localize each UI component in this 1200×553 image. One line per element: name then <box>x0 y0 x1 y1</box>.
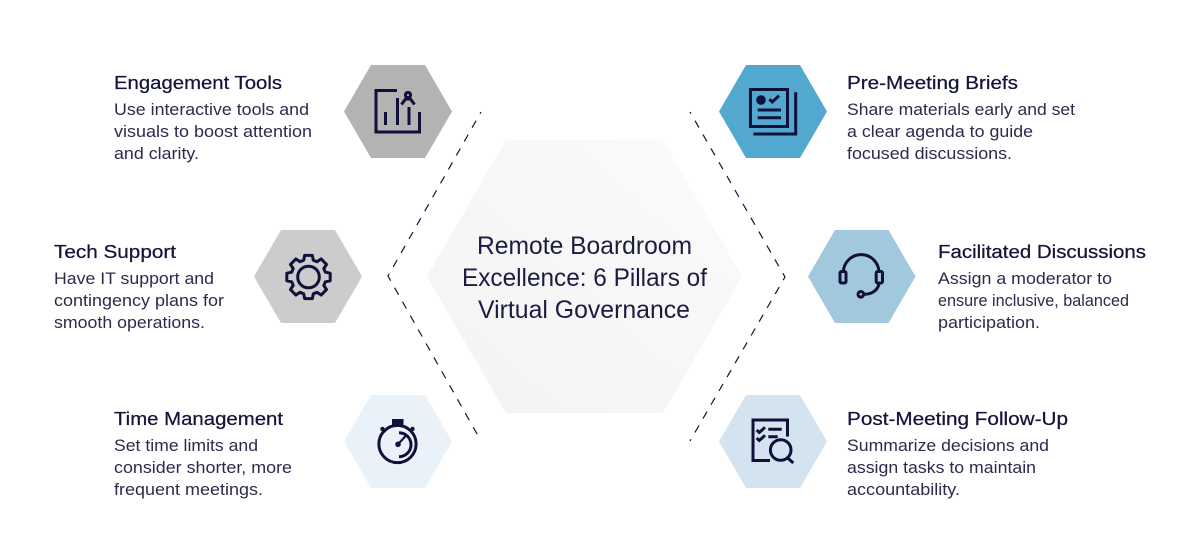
hexagon: Time Management <box>344 395 452 488</box>
description: Pre-Meeting Briefs: a clear agenda to guide <box>847 122 1033 141</box>
dashed bracket: right <box>690 112 785 441</box>
description: Post-Meeting Follow-Up: accountability. <box>847 480 960 499</box>
heading: Tech Support: Tech Support <box>54 241 177 262</box>
title: Remote Boardroom <box>477 232 692 260</box>
description: Pre-Meeting Briefs: Share materials early and set <box>847 100 1075 119</box>
description: Time Management: frequent meetings. <box>114 480 263 499</box>
icon: checklist with magnifier <box>753 420 793 463</box>
description: Tech Support <box>54 269 224 332</box>
pillar: Time Management <box>114 395 452 499</box>
description: Tech Support: contingency plans for <box>54 291 224 310</box>
dashed bracket: left <box>388 112 481 441</box>
icon: headset <box>840 255 882 297</box>
description: Pre-Meeting Briefs <box>847 100 1075 163</box>
description: Facilitated Discussions: Assign a moderator to <box>938 269 1112 288</box>
heading: Pre-Meeting Briefs: Pre-Meeting Briefs <box>847 72 1018 93</box>
heading: Facilitated Discussions: Facilitated Discussions <box>938 241 1146 262</box>
description: Tech Support: Have IT support and <box>54 269 214 288</box>
description: Facilitated Discussions: participation. <box>938 313 1040 332</box>
description: Post-Meeting Follow-Up: Summarize decisions and <box>847 436 1049 455</box>
description: Tech Support: smooth operations. <box>54 313 205 332</box>
description: Engagement Tools: Use interactive tools and <box>114 100 309 119</box>
description: Pre-Meeting Briefs: focused discussions. <box>847 144 1012 163</box>
central hexagon shape <box>427 140 742 413</box>
heading: Post-Meeting Follow-Up: Post-Meeting Follow-Up <box>847 408 1068 429</box>
hexagon: Facilitated Discussions <box>808 230 916 323</box>
heading: Engagement Tools: Engagement Tools <box>114 72 282 93</box>
description: Engagement Tools: and clarity. <box>114 144 199 163</box>
icon: chart with person <box>376 90 420 132</box>
pillar: Tech Support <box>54 230 362 332</box>
title: Virtual Governance <box>478 296 690 324</box>
description: Facilitated Discussions <box>938 269 1129 332</box>
title <box>462 232 707 324</box>
description: Time Management <box>114 436 292 499</box>
description: Post-Meeting Follow-Up: assign tasks to maintain <box>847 458 1036 477</box>
icon: gear <box>287 255 330 299</box>
description: Post-Meeting Follow-Up <box>847 436 1049 499</box>
pillar: Post-Meeting Follow-Up <box>719 395 1068 499</box>
hexagon: Engagement Tools <box>344 65 452 158</box>
hexagon: Tech Support <box>254 230 362 323</box>
description: Engagement Tools <box>114 100 312 163</box>
pillar: Facilitated Discussions <box>808 230 1146 332</box>
hexagon: Pre-Meeting Briefs <box>719 65 827 158</box>
heading: Time Management: Time Management <box>114 408 284 429</box>
description: Time Management: Set time limits and <box>114 436 258 455</box>
pillar: Pre-Meeting Briefs <box>719 65 1075 163</box>
icon: documents <box>750 90 796 134</box>
description: Time Management: consider shorter, more <box>114 458 292 477</box>
pillar: Engagement Tools <box>114 65 452 163</box>
central hexagon with title <box>427 140 742 413</box>
description: Engagement Tools: visuals to boost attention <box>114 122 312 141</box>
title: Excellence: 6 Pillars of <box>462 264 707 292</box>
icon: stopwatch <box>379 419 416 463</box>
description: Facilitated Discussions: ensure inclusive, balanced <box>938 291 1129 310</box>
hexagon: Post-Meeting Follow-Up <box>719 395 827 488</box>
